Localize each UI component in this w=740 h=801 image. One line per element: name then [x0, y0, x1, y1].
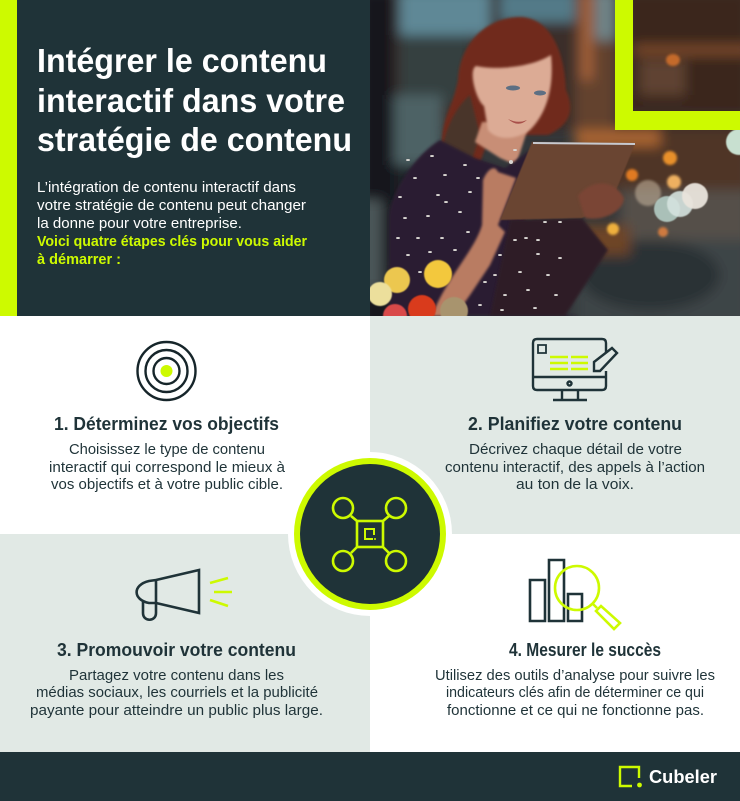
panel: step 1: [0, 316, 370, 534]
woman: neck: [475, 122, 530, 165]
text: step 1: Choisissez le type de contenu: [69, 442, 265, 458]
woman: hair: [440, 15, 572, 160]
text: step 2: Décrivez chaque détail de votre: [469, 442, 682, 458]
photo: woman with tablet: [360, 0, 740, 330]
heading: step 4: 4. Mesurer le succès: [509, 640, 661, 660]
woman: shirt: [389, 140, 580, 316]
center badge: [288, 452, 452, 616]
title: interactif dans votre: [37, 82, 345, 119]
text: step 3: payante pour atteindre un public plus large.: [30, 703, 323, 719]
lime frame: [615, 0, 740, 130]
bokeh lights: [368, 129, 740, 328]
icon: megaphone: [137, 570, 232, 620]
panel: step 4: [370, 534, 740, 752]
woman: face: [473, 55, 552, 138]
panel: step 3: [0, 534, 370, 752]
panel: header text background: [0, 0, 370, 316]
shirt dots: [396, 149, 562, 311]
intro text: Voici quatre étapes clés pour vous aider: [37, 234, 307, 250]
text: step 2: [445, 442, 705, 493]
text: step 1: vos objectifs et à votre public cible.: [51, 477, 283, 493]
text: step 1: interactif qui correspond le mieux à: [49, 460, 286, 476]
text: step 4: fonctionne et ce qui ne fonctionne pas.: [447, 703, 704, 719]
heading: step 1: 1. Déterminez vos objectifs: [54, 414, 279, 434]
panel: step 2: [370, 316, 740, 534]
heading: step 3: 3. Promouvoir votre contenu: [57, 640, 296, 660]
icon: monitor with pencil: [533, 339, 617, 400]
intro text: votre stratégie de contenu peut changer: [37, 198, 306, 214]
intro text: la donne pour votre entreprise.: [37, 216, 242, 232]
intro text: à démarrer :: [37, 252, 121, 268]
text: step 3: [30, 668, 323, 719]
footer: [0, 752, 740, 801]
text: step 3: Partagez votre contenu dans les: [69, 668, 284, 684]
heading: step 2: 2. Planifiez votre contenu: [468, 414, 682, 434]
icon: network hub: [333, 498, 406, 571]
text: step 4: indicateurs clés afin de déterminer ce qui: [446, 685, 704, 701]
icon: bars and magnifier: [530, 560, 620, 629]
title: Intégrer le contenu: [37, 42, 327, 79]
text: step 1: [49, 442, 286, 493]
title: stratégie de contenu: [37, 121, 352, 158]
text: step 4: [435, 668, 715, 719]
logo: Cubeler: Cubeler: [649, 767, 717, 787]
text: step 2: au ton de la voix.: [516, 477, 634, 493]
intro text: [37, 180, 307, 268]
icon: target: [138, 342, 196, 400]
intro text: L’intégration de contenu interactif dans: [37, 180, 296, 196]
title: [37, 42, 352, 158]
text: step 3: médias sociaux, les courriels et la publicité: [36, 685, 318, 701]
text: step 2: contenu interactif, des appels à l’action: [445, 460, 705, 476]
text: step 4: Utilisez des outils d’analyse pour suivre les: [435, 668, 715, 684]
tablet: [500, 142, 635, 220]
woman: arm and hand: [432, 168, 516, 316]
logo: Cubeler: [620, 767, 717, 787]
